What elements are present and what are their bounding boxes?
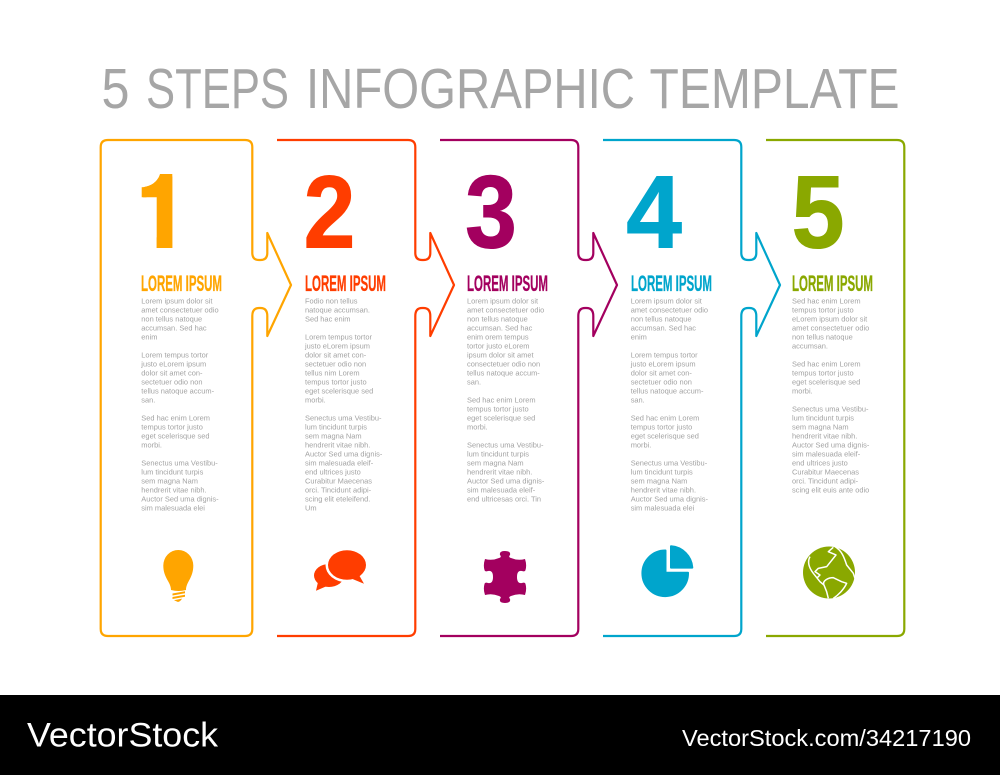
body text 4: Lorem tempus tortor [631,350,698,360]
body text 1: lum tincidunt turpis [141,468,204,476]
body text 3: Senectus uma Vestibu- [467,440,544,450]
body text 3: ipsum dolor sit amet [467,350,534,360]
footer logo text: VectorStock [27,716,219,754]
panel: step 5 [766,140,904,636]
body text 1: eget scelerisque sed [141,432,210,440]
body text 1: Sed hac enim Lorem [141,414,210,422]
step number 2: 2 [304,154,355,270]
body text 3: eget scelerisque sed [467,414,535,422]
body text 3: Auctor Sed uma dignis- [467,476,545,486]
body text 4: morbi. [631,440,651,450]
body text 3: Lorem ipsum dolor sit [467,296,539,306]
body text 5: Curabitur Maecenas [792,468,859,476]
icon: pie chart [642,546,692,596]
body text 3: lum tincidunt turpis [467,450,529,458]
body text 1: justo eLorem ipsum [140,360,206,368]
body text 1: sim malesuada elei [141,504,205,512]
body text 2: Lorem tempus tortor [305,332,372,342]
body text 4: tempus tortor justo [631,422,692,432]
panel: step 3 [440,140,617,636]
body text 2: justo eLorem ipsum [304,342,370,350]
body text 4: san. [631,396,645,404]
body text 1: tempus tortor justo [141,422,203,432]
body text 5: eLorem ipsum dolor sit [792,314,868,324]
body text 4: non tellus natoque [631,314,691,324]
panel outline with arrow [101,140,291,636]
body text 2: tellus nim Lorem [305,368,360,378]
body text 4: Sed hac enim Lorem [631,414,699,422]
body text 3: non tellus natoque [467,314,528,324]
panel: step 4 [603,140,780,636]
body text 1: dolor sit amet con- [141,368,203,378]
body text 5: eget scelerisque sed [792,378,860,386]
body text 2: end ultrices justo [305,468,361,476]
title: STEPS [146,57,289,121]
heading 2: LOREM IPSUM [305,271,386,296]
body text 2: Senectus uma Vestibu- [305,414,382,422]
body text 5: Auctor Sed uma dignis- [792,440,870,450]
panel outline with arrow [440,140,617,636]
body text 3: Sed hac enim Lorem [467,396,536,404]
step number 3: 3 [465,154,517,270]
body text 4: amet consectetuer odio [631,306,708,314]
body text 3: tellus natoque accum- [467,368,540,378]
footer url text: VectorStock.com/34217190 [682,725,971,751]
body text 2: dolor sit amet con- [305,350,367,360]
body text 5: scing elit euis ante odio [792,486,869,494]
body text 3: morbi. [467,422,488,432]
body text 5: non tellus natoque [792,332,853,342]
body text 1: sectetuer odio non [141,378,203,386]
body text 5: Sed hac enim Lorem [792,296,861,306]
body text 1: accumsan. Sed hac [141,324,207,332]
panel outline with arrow [277,140,454,636]
body text 3: sim malesuada eleif- [467,486,536,494]
body text 4: accumsan. Sed hac [631,324,696,332]
title [102,57,900,121]
body text 1: sem magna Nam [141,476,198,486]
body text 1: morbi. [141,440,162,450]
body text 5: orci. Tincidunt adipi- [792,476,859,486]
body text 1: san. [141,396,155,404]
heading 5: LOREM IPSUM [792,271,873,296]
body text 3: tortor justo eLorem [467,342,529,350]
body text 4: lum tincidunt turpis [631,468,693,476]
body text 2: Curabitur Maecenas [305,476,372,486]
body text 5: tempus tortor justo [792,368,854,378]
panel: step 1 [101,140,291,636]
body text 4: Senectus uma Vestibu- [631,458,708,468]
body text 2: tempus tortor justo [305,378,367,386]
heading 3: LOREM IPSUM [467,271,548,296]
body text 4: enim [631,332,647,342]
body text 4: eget scelerisque sed [631,432,699,440]
body text 2: lum tincidunt turpis [305,422,367,432]
body text 3: san. [467,378,481,386]
step number 5: 5 [792,154,844,269]
icon: light bulb [163,550,193,602]
title: INFOGRAPHIC [306,57,635,121]
body text 2: Fodio non tellus [305,296,358,306]
body text 3: enim orem tempus [467,332,529,342]
step number 1: 1 [136,155,194,271]
body text 2: sectetuer odio non [305,360,366,368]
body text 4: sim malesuada elei [631,504,695,512]
body text 3: tempus tortor justo [467,404,529,414]
heading 1: LOREM IPSUM [141,271,222,296]
icon: puzzle piece [484,551,526,603]
body text 2: eget scelerisque sed [305,386,373,396]
body text 5: morbi. [792,386,813,396]
body text 3: hendrerit vitae nibh. [467,468,532,476]
body text 2: natoque accumsan. [305,306,370,314]
body text 4: justo eLorem ipsum [630,360,696,368]
body text 5: amet consectetuer odio [792,324,869,332]
body text 5: Sed hac enim Lorem [792,360,861,368]
body text 3: consectetuer odio non [467,360,540,368]
body text 3: amet consectetuer odio [467,306,544,314]
body text 2: hendrerit vitae nibh. [305,440,370,450]
icon: speech bubbles [314,548,368,591]
body text 4: dolor sit amet con- [631,368,692,378]
body text 1: Lorem tempus tortor [141,350,209,360]
title: TEMPLATE [650,57,900,121]
body text 2: scing elit eteleifend. [305,494,370,504]
body text 5: sem magna Nam [792,422,849,432]
body text 4: hendrerit vitae nibh. [631,486,696,494]
body text 5: Senectus uma Vestibu- [792,404,869,414]
body text 1: tellus natoque accum- [141,386,215,396]
step number 4: 4 [626,154,682,270]
body text 5: hendrerit vitae nibh. [792,432,857,440]
body text 1: non tellus natoque [141,314,202,324]
body text 2: orci. Tincidunt adipi- [305,486,372,494]
panel outline with arrow [603,140,780,636]
body text 5: accumsan. [792,342,828,350]
body text 3: accumsan. Sed hac [467,324,533,332]
icon: globe [803,546,855,598]
body text 2: Auctor Sed uma dignis- [305,450,383,458]
heading 4: LOREM IPSUM [631,271,712,296]
footer bar [0,695,1000,775]
panel outline [766,140,904,636]
body text 5: sim malesuada eleif- [792,450,861,458]
body text 2: Sed hac enim [305,314,350,324]
body text 1: Senectus uma Vestibu- [141,458,218,468]
body text 3: sem magna Nam [467,458,524,468]
body text 2: Um [305,504,317,512]
body text 4: tellus natoque accum- [631,386,704,396]
body text 1: hendrerit vitae nibh. [141,486,207,494]
body text 5: tempus tortor justo [792,306,854,314]
body text 5: lum tincidunt turpis [792,414,854,422]
body text 1: Auctor Sed uma dignis- [141,494,219,504]
body text 2: sim malesuada eleif- [305,458,374,468]
body text 3: end ultricesas orci. Tin [467,494,541,504]
body text 4: sectetuer odio non [631,378,692,386]
body text 5: end ultrices justo [792,458,848,468]
body text 4: Auctor Sed uma dignis- [631,494,709,504]
title: 5 [102,57,130,121]
body text 2: morbi. [305,396,326,404]
body text 2: sem magna Nam [305,432,362,440]
body text 4: sem magna Nam [631,476,687,486]
body text 4: Lorem ipsum dolor sit [631,296,703,306]
panel: step 2 [277,140,454,636]
body text 1: Lorem ipsum dolor sit [141,296,213,306]
body text 1: enim [141,332,157,342]
body text 1: amet consectetuer odio [141,306,219,314]
